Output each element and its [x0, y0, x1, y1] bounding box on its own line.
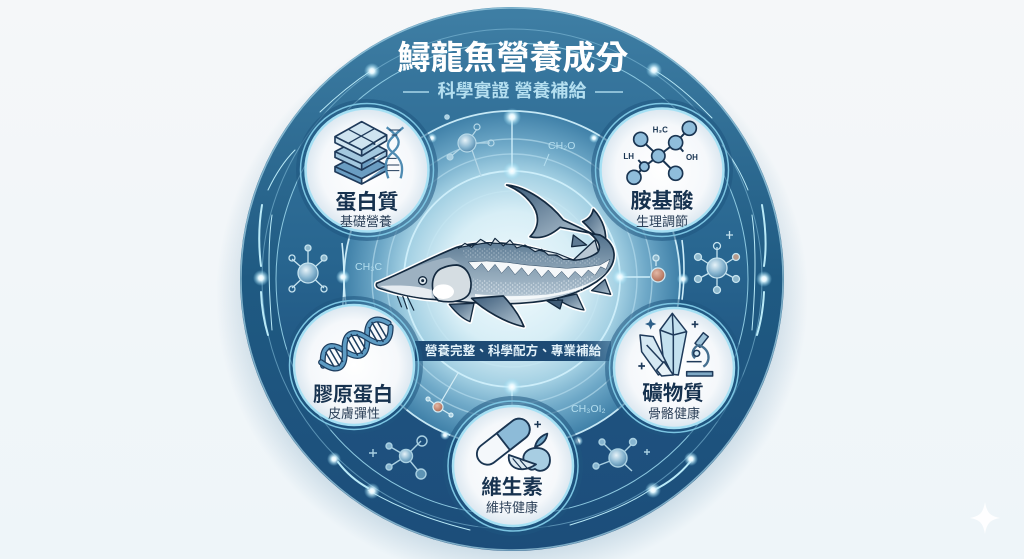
body belly highlight — [475, 270, 608, 300]
panel: amino acid — [591, 99, 733, 241]
label: 蛋白質 — [336, 191, 398, 214]
barbels — [397, 296, 414, 311]
sublabel: 基礎營養 — [340, 214, 392, 229]
molecule: lower right — [593, 438, 650, 471]
upper tail lobe — [507, 185, 592, 238]
panel: collagen — [285, 296, 423, 434]
sublabel: 皮膚彈性 — [328, 406, 380, 421]
icon: capsule and fruit — [473, 414, 550, 471]
icon: amino acid molecule: LH — [623, 152, 634, 161]
molecule: lower left — [369, 436, 427, 479]
molecule: left — [289, 245, 327, 292]
orbit lines — [342, 111, 684, 447]
white sticker halo — [376, 185, 614, 327]
glow nodes — [253, 62, 772, 499]
sublabel: 維持健康 — [486, 500, 538, 515]
molecule: red atom right — [651, 255, 665, 282]
formula: CH2O: CH₂O — [548, 140, 575, 152]
icon: amino acid molecule: H₃C — [653, 126, 668, 135]
head — [377, 257, 460, 299]
label: 維生素 — [481, 476, 543, 499]
molecule: upper centre — [445, 115, 494, 176]
small tail fin — [573, 240, 598, 260]
banner — [415, 341, 611, 361]
rim light accents — [259, 70, 766, 530]
icon: DNA helix — [316, 314, 396, 375]
pectoral fin — [472, 296, 524, 327]
panel: protein — [296, 99, 438, 241]
gill cover — [432, 265, 471, 302]
molecule: right — [694, 231, 740, 294]
eye — [419, 277, 427, 285]
label: 礦物質 — [642, 382, 704, 405]
sublabel: 生理調節 — [636, 214, 688, 229]
banner: 營養完整、科學配方、專業補給 — [425, 343, 602, 358]
icon: crystals and microscope — [638, 313, 713, 376]
formula: CH3C: CH₃C — [355, 261, 382, 273]
fish: sturgeon — [376, 185, 614, 327]
lower fins — [592, 279, 611, 294]
formula: CH3OI2: CH₃OI₂ — [571, 403, 606, 415]
title: 鱘龍魚營養成分 — [398, 39, 628, 76]
label: 胺基酸 — [630, 190, 694, 213]
formula: CH2O — [544, 140, 575, 166]
body — [376, 233, 614, 304]
label: 膠原蛋白 — [313, 383, 393, 406]
molecule: red atom lower — [426, 373, 458, 417]
body dots — [472, 273, 600, 295]
dorsal scutes — [458, 238, 572, 259]
subtitle: 科學實證 營養補給 — [437, 80, 587, 101]
icon: amino acid molecule — [623, 121, 698, 184]
icon: amino acid molecule: OH — [686, 153, 698, 162]
main disc — [240, 7, 784, 551]
icon: protein blocks and DNA — [335, 122, 403, 184]
icon: sparkle watermark — [970, 502, 1000, 534]
sublabel: 骨骼健康 — [648, 406, 700, 421]
panel: vitamins — [443, 396, 583, 536]
panel: minerals — [605, 299, 743, 437]
lateral scutes — [468, 259, 610, 279]
